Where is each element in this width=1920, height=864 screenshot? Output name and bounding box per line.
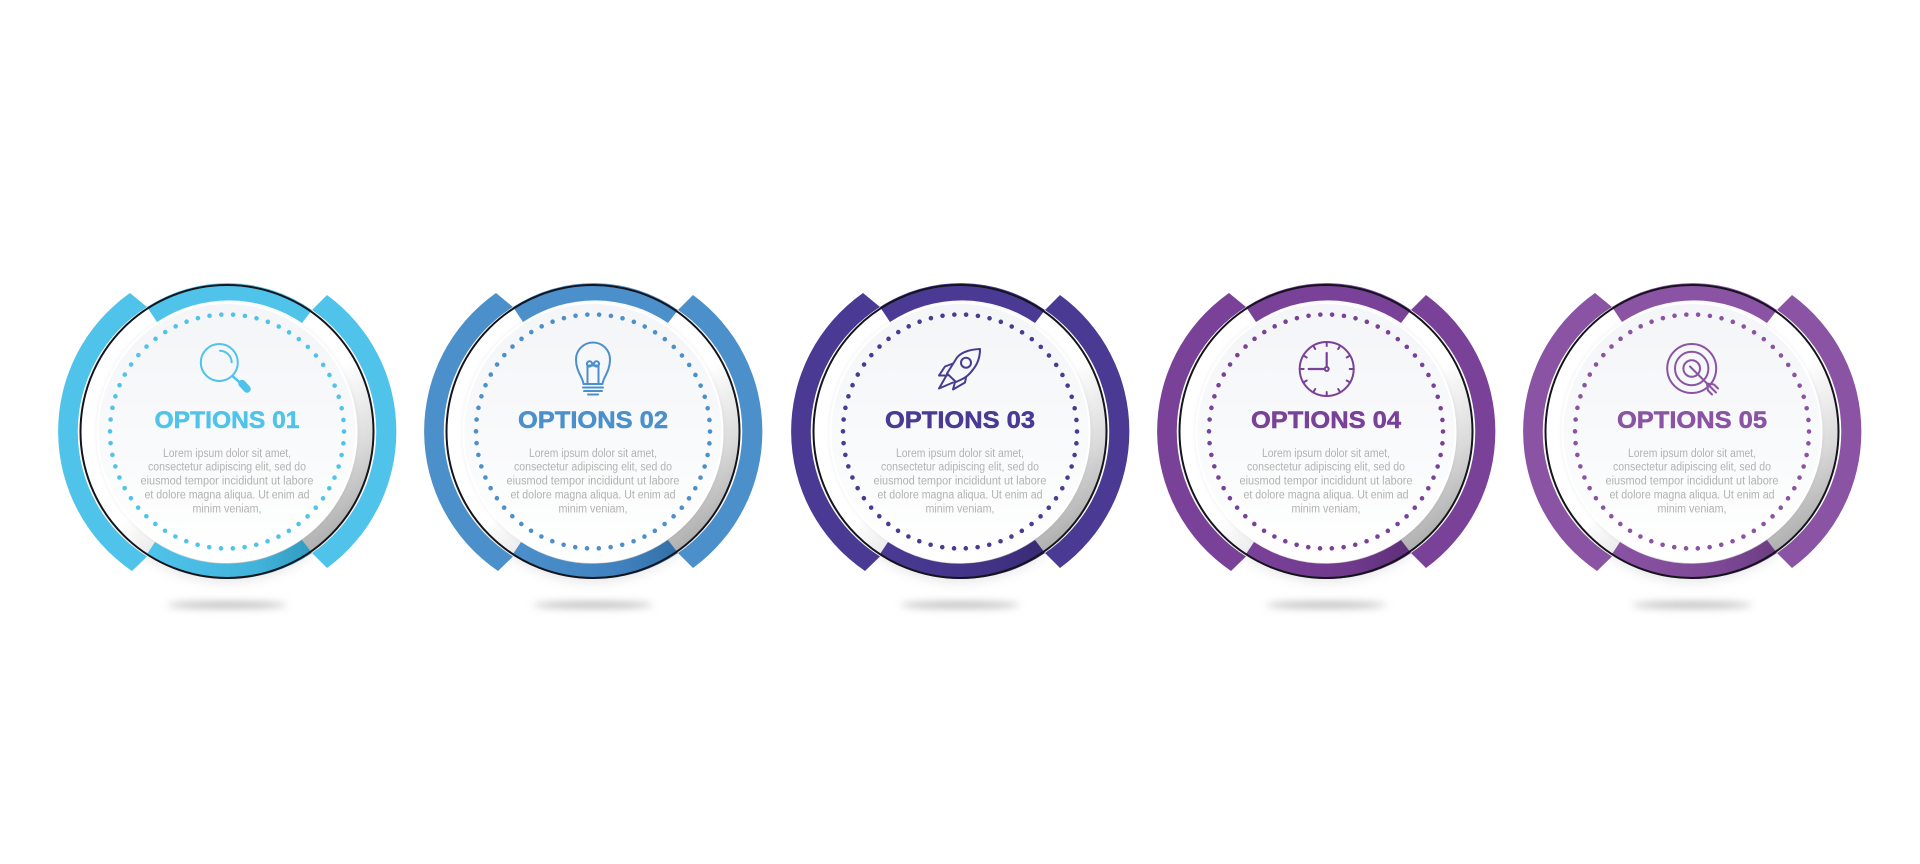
grey backing disc	[447, 286, 739, 578]
white disc	[98, 303, 356, 562]
body text: minim veniam,	[926, 504, 994, 516]
body text: et dolore magna aliqua. Ut enim ad	[1244, 490, 1408, 502]
body text: eiusmod tempor incididunt ut labore	[1606, 476, 1778, 488]
icon: clock	[1300, 342, 1354, 396]
option card 5	[1523, 283, 1861, 608]
body text: Lorem ipsum dolor sit amet,	[529, 448, 657, 460]
bottom arc	[1612, 540, 1777, 579]
top arc	[1246, 283, 1411, 323]
grey backing disc	[1180, 286, 1472, 578]
right arc	[1777, 295, 1861, 568]
dotted ring	[843, 314, 1077, 548]
body text: consectetur adipiscing elit, sed do	[514, 462, 672, 474]
body text: consectetur adipiscing elit, sed do	[881, 462, 1039, 474]
body text	[506, 448, 680, 516]
left arc	[1157, 293, 1246, 571]
body text: eiusmod tempor incididunt ut labore	[1240, 476, 1412, 488]
body text: et dolore magna aliqua. Ut enim ad	[1610, 490, 1774, 502]
icon: magnifying glass	[201, 344, 247, 389]
white disc	[464, 303, 722, 562]
body text: consectetur adipiscing elit, sed do	[148, 462, 306, 474]
soft shadow under circle	[89, 304, 365, 580]
grey backing disc	[81, 286, 373, 578]
body text: et dolore magna aliqua. Ut enim ad	[144, 490, 310, 502]
ground shadow	[900, 602, 1020, 608]
icon: target with arrow	[1667, 344, 1718, 394]
dotted ring	[476, 314, 710, 548]
black outline circle	[1546, 285, 1838, 578]
top arc	[147, 283, 312, 323]
body text: Lorem ipsum dolor sit amet,	[163, 448, 291, 460]
option card 3	[791, 283, 1129, 608]
body text: Lorem ipsum dolor sit amet,	[1262, 448, 1390, 460]
black outline circle	[446, 285, 740, 578]
body text: Lorem ipsum dolor sit amet,	[1628, 448, 1756, 460]
bottom arc	[147, 540, 312, 579]
body text: eiusmod tempor incididunt ut labore	[140, 476, 314, 488]
bottom arc	[513, 540, 678, 579]
dotted ring	[1209, 314, 1443, 548]
black outline circle	[80, 285, 374, 578]
right arc	[1045, 295, 1129, 568]
ground shadow	[1632, 602, 1752, 608]
body text	[874, 448, 1046, 516]
body text: minim veniam,	[192, 504, 262, 516]
left arc	[424, 293, 513, 571]
soft shadow under circle	[455, 304, 731, 580]
body text: Lorem ipsum dolor sit amet,	[896, 448, 1024, 460]
black outline circle	[814, 285, 1106, 578]
top arc	[1612, 283, 1777, 323]
body text	[1606, 448, 1778, 516]
body text	[140, 448, 314, 516]
white disc	[1562, 303, 1822, 562]
body text: minim veniam,	[1658, 504, 1726, 516]
white disc	[1196, 303, 1456, 562]
left arc	[791, 293, 880, 571]
black outline circle	[1180, 285, 1472, 578]
top arc	[880, 283, 1045, 323]
ground shadow	[533, 602, 653, 608]
heading: OPTIONS 04	[1251, 407, 1402, 434]
soft shadow under circle	[822, 304, 1098, 580]
body text: consectetur adipiscing elit, sed do	[1613, 462, 1771, 474]
bottom arc	[1246, 540, 1411, 579]
soft shadow under circle	[1188, 304, 1464, 580]
grey backing disc	[814, 286, 1106, 578]
grey backing disc	[1546, 286, 1838, 578]
left arc	[58, 293, 147, 571]
icon: rocket	[939, 349, 980, 390]
heading: OPTIONS 05	[1617, 407, 1767, 434]
soft shadow under circle	[1554, 304, 1830, 580]
white disc	[830, 303, 1090, 562]
option card 4	[1157, 283, 1495, 608]
body text: eiusmod tempor incididunt ut labore	[506, 476, 680, 488]
heading: OPTIONS 01	[154, 407, 300, 434]
body text	[1240, 448, 1412, 516]
icon: light bulb	[576, 342, 610, 394]
option card 2	[424, 283, 762, 608]
right arc	[678, 295, 762, 568]
bottom arc	[880, 540, 1045, 579]
dotted ring	[1575, 314, 1809, 548]
option card 1	[58, 283, 396, 608]
body text: et dolore magna aliqua. Ut enim ad	[510, 490, 676, 502]
heading: OPTIONS 02	[518, 407, 668, 434]
ground shadow	[1266, 602, 1386, 608]
heading: OPTIONS 03	[885, 407, 1035, 434]
ground shadow	[167, 602, 287, 608]
left arc	[1523, 293, 1612, 571]
body text: et dolore magna aliqua. Ut enim ad	[878, 490, 1042, 502]
top arc	[513, 283, 678, 323]
right arc	[312, 295, 396, 568]
body text: eiusmod tempor incididunt ut labore	[874, 476, 1046, 488]
right arc	[1411, 295, 1495, 568]
dotted ring	[110, 314, 344, 548]
body text: consectetur adipiscing elit, sed do	[1247, 462, 1405, 474]
body text: minim veniam,	[558, 504, 628, 516]
body text: minim veniam,	[1292, 504, 1360, 516]
